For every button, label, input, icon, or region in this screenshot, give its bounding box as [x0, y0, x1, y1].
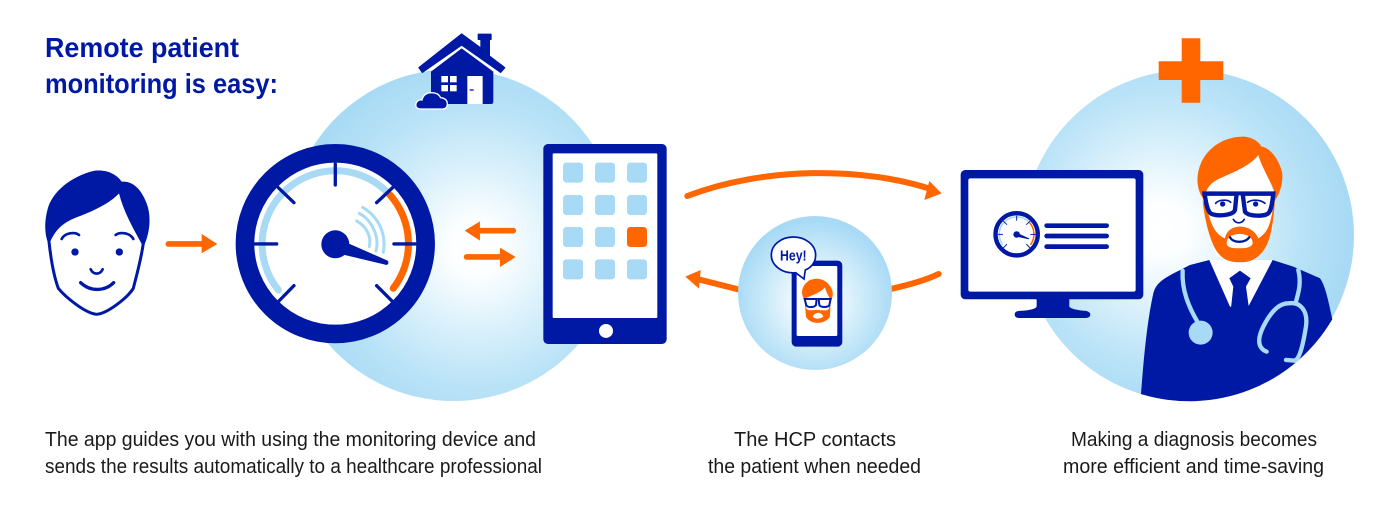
icon: mini gauge	[996, 213, 1038, 255]
icon: desktop monitor	[961, 170, 1143, 318]
icon: patient face	[45, 170, 150, 314]
doctor head	[1205, 155, 1274, 262]
title	[45, 32, 278, 99]
report lines	[1047, 226, 1107, 247]
icon: monitoring gauge	[245, 153, 426, 334]
icon: tablet with app grid	[543, 144, 667, 344]
panel: HCP call circle	[738, 216, 892, 370]
stethoscope	[1183, 270, 1306, 361]
text: diagnosis caption	[1063, 429, 1324, 478]
text: app guidance caption: sends the results automatically to a healthcare professional	[45, 456, 542, 478]
title: monitoring is easy:	[45, 68, 278, 99]
arrow: patient to device	[168, 234, 217, 253]
text: HCP contact caption: The HCP contacts	[734, 429, 896, 451]
text: diagnosis caption: more efficient and time-saving	[1063, 456, 1324, 478]
text: app guidance caption: The app guides you with using the monitoring device and	[45, 429, 536, 451]
icon: phone with HCP and speech bubble	[771, 237, 842, 347]
text: app guidance caption	[45, 429, 542, 478]
panel: home background circle	[288, 69, 620, 401]
arrow: tablet to monitor	[687, 173, 942, 200]
title: Remote patient	[45, 32, 239, 63]
doctor body	[1141, 260, 1332, 401]
panel: clinic background circle	[1023, 70, 1354, 401]
arrow: monitor back to tablet through HCP call	[685, 270, 939, 291]
text: HCP contact caption	[708, 429, 921, 478]
icon: medical cross	[1159, 38, 1223, 103]
icon: doctor	[1141, 137, 1332, 401]
arrows: device and tablet exchange	[465, 221, 516, 267]
text: diagnosis caption: Making a diagnosis becomes	[1071, 429, 1317, 451]
icon: house	[416, 34, 505, 109]
text: HCP contact caption: the patient when needed	[708, 456, 921, 478]
icon: phone with HCP and speech bubble: Hey!	[780, 249, 807, 265]
